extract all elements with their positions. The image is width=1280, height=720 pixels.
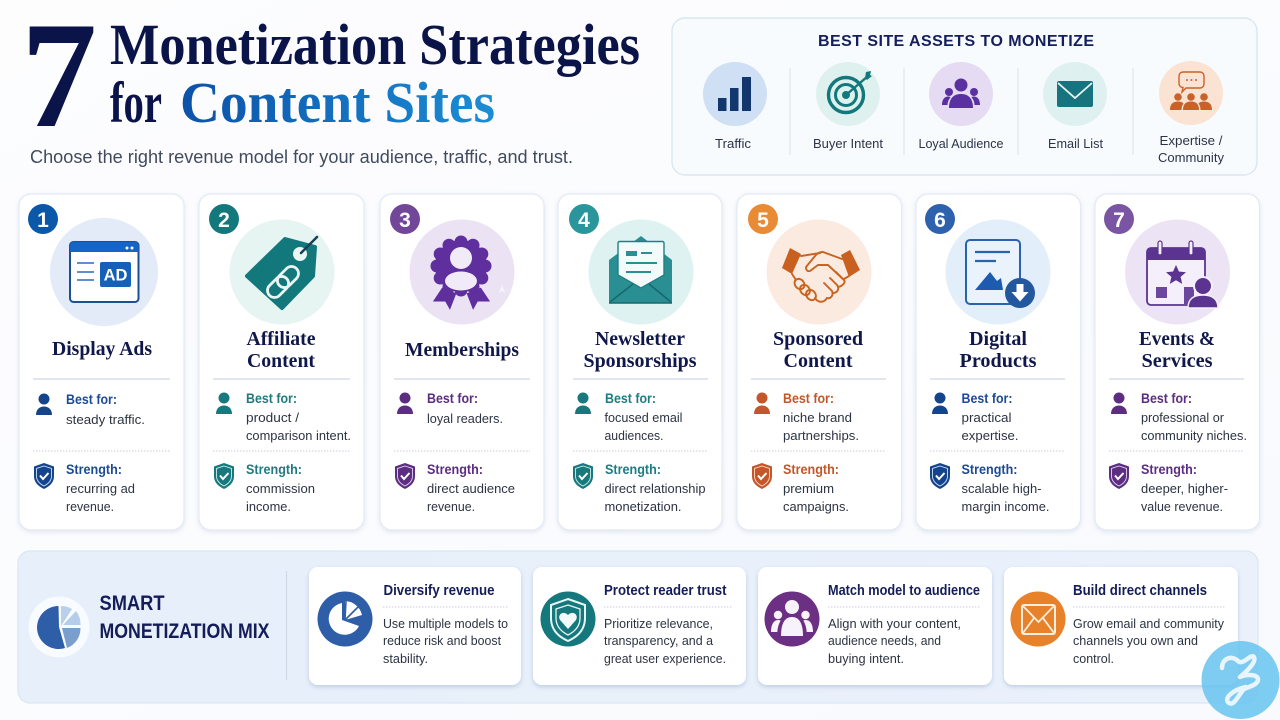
- tip: build direct channels: Build direct channels: [1073, 583, 1207, 599]
- tip: diversify revenue: reduce risk and boost: [383, 633, 501, 648]
- strength: revenue.: [427, 499, 475, 514]
- best for: [754, 391, 859, 443]
- strength: direct audience: [427, 481, 515, 496]
- asset: traffic: [703, 62, 767, 151]
- strength: [573, 462, 706, 514]
- tip: match model to audience: buying intent.: [828, 651, 904, 666]
- asset: loyal audience: Loyal Audience: [918, 136, 1004, 151]
- tip: diversify revenue: stability.: [383, 651, 428, 666]
- number badge 7: 7: [1113, 209, 1125, 232]
- strength: [752, 462, 849, 514]
- number badge 6: 6: [934, 209, 946, 232]
- tip: build direct channels: [1004, 567, 1238, 685]
- tip: match model to audience: audience needs, and: [828, 633, 941, 648]
- icon: people: [764, 592, 820, 646]
- title: [21, 0, 640, 159]
- tip: protect reader trust: [533, 567, 746, 685]
- title highlight: Content Sites: [180, 70, 495, 135]
- asset: expertise community: [1158, 61, 1224, 165]
- number badge 2: [209, 204, 239, 234]
- card title: Memberships: [405, 339, 519, 361]
- tip: protect reader trust: Protect reader trust: [604, 583, 727, 599]
- tip: match model to audience: Match model to audience: [828, 583, 980, 599]
- strength: direct relationship: [604, 481, 706, 496]
- tip: protect reader trust: transparency, and a: [604, 633, 714, 648]
- card title: Sponsored: [773, 328, 864, 350]
- strength: income.: [246, 499, 291, 514]
- strength: [214, 462, 315, 514]
- best for: [36, 392, 145, 427]
- card title: [960, 328, 1037, 372]
- subtitle: Choose the right revenue model for your audience, traffic, and trust.: [30, 146, 573, 167]
- number badge 4: 4: [578, 209, 590, 232]
- icon: watermark logo: [1202, 641, 1280, 719]
- best for: focused email: [604, 410, 683, 425]
- tip: match model to audience: Align with your content,: [828, 616, 961, 631]
- best for: Best for:: [962, 391, 1012, 406]
- card 2: affiliate content: [199, 194, 364, 530]
- number badge 5: [748, 204, 778, 234]
- asset: traffic: Traffic: [715, 136, 751, 151]
- card title: Products: [960, 350, 1037, 372]
- number badge 1: [28, 204, 58, 234]
- asset: expertise community: Community: [1158, 150, 1224, 165]
- card title: Services: [1142, 350, 1213, 372]
- strength: monetization.: [604, 499, 682, 514]
- number badge 6: [925, 204, 955, 234]
- card 7: events and services: [1095, 194, 1260, 530]
- number badge 3: 3: [399, 209, 411, 232]
- best for: product /: [246, 410, 299, 425]
- strength: Strength:: [427, 462, 483, 477]
- best for: Best for:: [605, 391, 656, 406]
- strength: [1109, 462, 1228, 514]
- icon: browser ad: AD: [104, 266, 127, 284]
- card 5: sponsored content: [737, 194, 902, 530]
- tip: build direct channels: Grow email and community: [1073, 616, 1224, 631]
- strength: Strength:: [962, 462, 1018, 477]
- asset: expertise community: Expertise /: [1160, 133, 1223, 148]
- best for: Best for:: [427, 391, 478, 406]
- best for: Best for:: [1141, 391, 1192, 406]
- strength: [930, 462, 1050, 514]
- strength: campaigns.: [783, 499, 849, 514]
- icon: handshake: [766, 220, 872, 324]
- card title: Newsletter: [595, 328, 685, 350]
- panel heading: BEST SITE ASSETS TO MONETIZE: [818, 33, 1094, 50]
- tip: diversify revenue: [309, 567, 521, 685]
- strength: margin income.: [962, 499, 1050, 514]
- icon: mail: [1010, 592, 1066, 646]
- best for: loyal readers.: [427, 411, 503, 426]
- best for: [1111, 391, 1247, 443]
- panel: smart monetization mix: [18, 551, 1258, 703]
- number badge 4: [569, 204, 599, 234]
- card title: Affiliate: [246, 328, 316, 350]
- icon: downloadable document: [946, 220, 1050, 324]
- best for: Best for:: [246, 391, 297, 406]
- strength: scalable high-: [962, 481, 1042, 496]
- icon: link tag: [230, 220, 334, 324]
- icon: shield heart: [540, 592, 596, 646]
- strength: revenue.: [66, 499, 114, 514]
- asset: email list: Email List: [1048, 136, 1103, 151]
- asset: buyer intent: [813, 62, 883, 151]
- icon: member rosette: [410, 220, 514, 324]
- panel: best site assets: [672, 18, 1257, 175]
- icon: browser ad: [50, 218, 158, 326]
- icon: open envelope: [588, 220, 694, 324]
- asset: loyal audience: [918, 62, 1004, 151]
- number badge 7: [1104, 204, 1134, 234]
- strength: [34, 462, 135, 514]
- asset: email list: [1043, 62, 1107, 151]
- best for: steady traffic.: [66, 412, 145, 427]
- best for: [932, 391, 1018, 443]
- icon: calendar with person: [1125, 220, 1230, 324]
- card 4: newsletter sponsorships: [558, 194, 722, 530]
- mix heading: SMART: [100, 592, 165, 615]
- strength: Strength:: [246, 462, 302, 477]
- card title: [584, 328, 697, 372]
- card title: Sponsorships: [584, 350, 697, 372]
- tip: protect reader trust: Prioritize relevance,: [604, 616, 713, 631]
- card 6: digital products: [916, 194, 1080, 530]
- card title: Content: [247, 350, 315, 372]
- best for: niche brand: [783, 410, 852, 425]
- card 1: display ads: [19, 194, 184, 530]
- strength: [395, 462, 515, 514]
- best for: partnerships.: [783, 428, 859, 443]
- strength: Strength:: [605, 462, 661, 477]
- tip: match model to audience: [758, 567, 992, 685]
- card title: [773, 328, 864, 372]
- tip: diversify revenue: Use multiple models to: [383, 616, 508, 631]
- best for: community niches.: [1141, 428, 1247, 443]
- best for: professional or: [1141, 410, 1225, 425]
- best for: audiences.: [604, 428, 664, 443]
- mix heading: [100, 592, 270, 643]
- tip: protect reader trust: great user experience.: [604, 651, 726, 666]
- best for: expertise.: [962, 428, 1018, 443]
- mix heading: MONETIZATION MIX: [100, 620, 270, 643]
- strength: Strength:: [783, 462, 839, 477]
- best for: practical: [962, 410, 1012, 425]
- card title: [246, 328, 316, 372]
- tip: build direct channels: control.: [1073, 651, 1114, 666]
- card title: Display Ads: [52, 338, 152, 360]
- number badge 3: [390, 204, 420, 234]
- best for: [216, 391, 351, 443]
- best for: comparison intent.: [246, 428, 351, 443]
- card title: Events &: [1139, 328, 1215, 350]
- number badge 5: 5: [757, 209, 769, 232]
- card title: Content: [784, 350, 853, 372]
- asset: buyer intent: Buyer Intent: [813, 136, 883, 151]
- icon: pie chart: [28, 596, 90, 658]
- strength: premium: [783, 481, 834, 496]
- number badge 1: 1: [37, 209, 49, 232]
- icon: pie: [318, 592, 372, 646]
- card title: [1139, 328, 1215, 372]
- tip: build direct channels: channels you own and: [1073, 633, 1198, 648]
- number badge 2: 2: [218, 209, 230, 232]
- strength: Strength:: [1141, 462, 1197, 477]
- card title: Digital: [969, 328, 1027, 350]
- strength: commission: [246, 481, 315, 496]
- card 3: memberships: [380, 194, 544, 530]
- title line 1: Monetization Strategies: [110, 12, 640, 77]
- strength: Strength:: [66, 462, 122, 477]
- strength: value revenue.: [1141, 499, 1223, 514]
- best for: Best for:: [66, 392, 117, 407]
- strength: recurring ad: [66, 481, 135, 496]
- best for: Best for:: [783, 391, 834, 406]
- best for: [397, 391, 503, 426]
- best for: [575, 391, 683, 443]
- tip: diversify revenue: Diversify revenue: [384, 583, 494, 599]
- strength: deeper, higher-: [1141, 481, 1228, 496]
- title line 2: for: [110, 70, 162, 135]
